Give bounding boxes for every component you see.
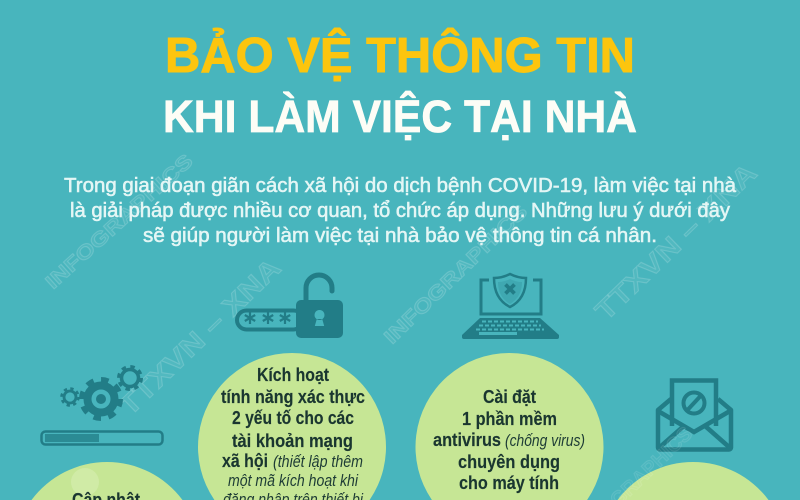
panel: two-factor authentication circle: 2 yếu tố cho các — [232, 407, 354, 428]
watermarks: TTXVN – XNA — [113, 252, 287, 421]
panel: two-factor authentication circle: một mã kích hoạt khi — [228, 472, 359, 490]
icon: password and open padlock — [237, 275, 343, 338]
title: KHI LÀM VIỆC TẠI NHÀ — [163, 91, 637, 142]
icon: envelope with blocked letter — [658, 380, 731, 450]
panel: antivirus circle — [415, 353, 604, 500]
panel: antivirus circle: chuyên dụng — [458, 451, 560, 472]
intro paragraph: Trong giai đoạn giãn cách xã hội do dịch bệnh COVID-19, làm việc tại nhà — [64, 175, 737, 197]
title: BẢO VỆ THÔNG TIN — [165, 28, 635, 83]
panel: antivirus circle: cho máy tính — [459, 472, 559, 493]
panel: two-factor authentication circle: Kích hoạt — [257, 364, 329, 385]
panel: antivirus circle: 1 phần mềm — [462, 408, 557, 429]
watermarks: INFOGRAPHICS — [42, 150, 198, 294]
watermarks: TTXVN – XNA — [589, 157, 763, 326]
intro paragraph: sẽ giúp người làm việc tại nhà bảo vệ thông tin cá nhân. — [143, 225, 657, 247]
panel: two-factor authentication circle: (thiết lập thêm — [273, 453, 363, 471]
intro paragraph — [64, 175, 737, 247]
watermarks — [42, 150, 763, 421]
icon: laptop with shield — [462, 274, 559, 339]
panel: two-factor authentication circle: tài khoản mạng — [232, 430, 353, 451]
panel: two-factor authentication circle: tính năng xác thực — [221, 386, 365, 407]
icon: gears and progress bar — [42, 366, 162, 444]
panel: two-factor authentication circle — [198, 353, 386, 500]
panel: two-factor authentication circle: xã hội — [222, 450, 268, 471]
panel: antivirus circle: Cài đặt — [483, 386, 536, 407]
panel: antivirus circle: antivirus — [433, 429, 501, 450]
panel: email caution circle — [618, 462, 768, 500]
watermarks: INFOGRAPHICS — [380, 201, 532, 349]
title — [163, 28, 637, 142]
intro paragraph: là giải pháp được nhiều cơ quan, tổ chức áp dụng. Những lưu ý dưới đây — [70, 200, 730, 222]
panel: update software circle — [32, 462, 182, 500]
panel: antivirus circle: (chống virus) — [505, 432, 585, 450]
